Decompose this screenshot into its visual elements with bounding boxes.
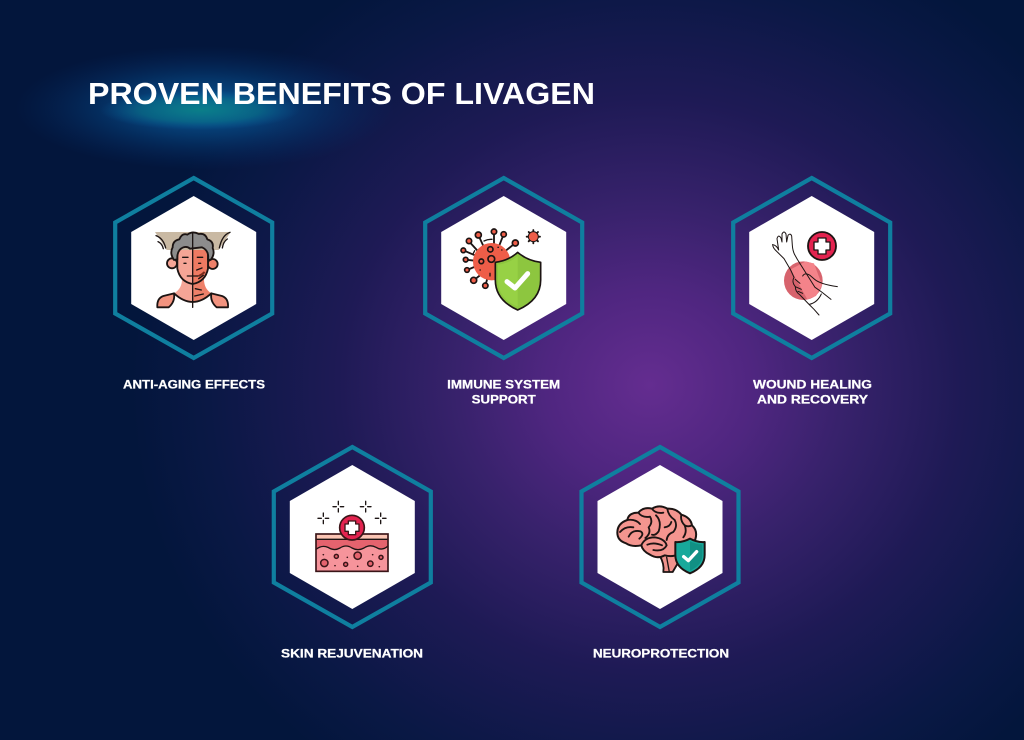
hexagon frame: wound healing	[733, 178, 890, 358]
label: immune system support: IMMUNE SYSTEM	[447, 378, 560, 392]
panel: immune system support	[425, 178, 582, 406]
label: skin rejuvenation: SKIN REJUVENATION	[281, 646, 423, 660]
panel: wound healing and recovery	[733, 178, 890, 406]
hexagon frame: neuroprotection	[582, 447, 738, 627]
label: wound healing and recovery	[753, 378, 872, 406]
panel: anti-aging effects	[115, 178, 272, 392]
icon: brain and shield	[617, 506, 705, 573]
title: PROVEN BENEFITS OF LIVAGEN	[88, 77, 595, 111]
label: anti-aging effects: ANTI-AGING EFFECTS	[123, 378, 265, 392]
label: immune system support: SUPPORT	[472, 392, 536, 406]
icon: virus and shield	[461, 229, 541, 310]
panel: neuroprotection	[582, 447, 738, 660]
hexagon frame: anti-aging	[115, 178, 272, 358]
panel: skin rejuvenation	[274, 447, 431, 660]
label: wound healing and recovery: WOUND HEALING	[753, 378, 872, 392]
hexagon frame: immune	[425, 178, 582, 358]
label: immune system support	[447, 378, 560, 406]
icon: injured arm and medical cross	[773, 232, 837, 315]
label: neuroprotection: NEUROPROTECTION	[593, 646, 729, 660]
icon: skin layers with medical cross	[316, 501, 388, 571]
label: wound healing and recovery: AND RECOVERY	[757, 392, 869, 406]
hexagon frame: skin	[274, 447, 431, 627]
icon: aging face	[155, 232, 231, 307]
